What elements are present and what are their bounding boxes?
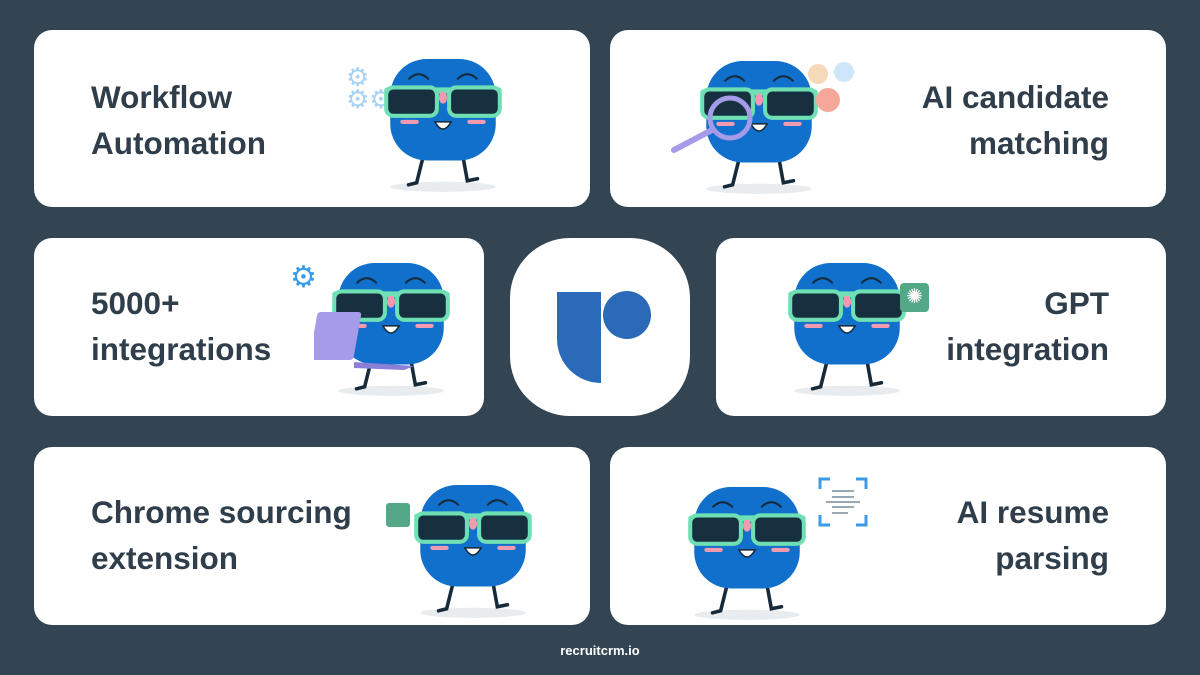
- heading: GPT: [1044, 285, 1109, 321]
- heading: [91, 79, 266, 161]
- icon: scan document: [818, 478, 868, 526]
- card: AI candidate matching: [610, 30, 1166, 207]
- heading: parsing: [995, 540, 1109, 576]
- logo: [510, 238, 690, 416]
- card: 5000+ integrations: [34, 238, 484, 416]
- card: AI resume parsing: [610, 447, 1166, 625]
- mascot: [688, 487, 806, 620]
- heading: [946, 285, 1109, 367]
- heading: Automation: [91, 125, 266, 161]
- heading: AI resume: [957, 494, 1109, 530]
- heading: [91, 494, 352, 576]
- heading: extension: [91, 540, 238, 576]
- heading: matching: [969, 125, 1109, 161]
- icon: gears: [346, 62, 393, 114]
- icon: integrations hub: ⚙: [290, 261, 317, 294]
- mascot: [788, 263, 906, 396]
- card: Workflow Automation: [34, 30, 590, 207]
- heading: AI candidate: [922, 79, 1109, 115]
- heading: [91, 285, 271, 367]
- icon: gears: ⚙: [346, 62, 369, 92]
- icon: chatgpt: [900, 283, 929, 312]
- heading: integration: [946, 331, 1109, 367]
- mascot: [414, 485, 532, 618]
- card: GPT integration: [716, 238, 1166, 416]
- heading: Workflow: [91, 79, 232, 115]
- mascot: [384, 59, 502, 192]
- heading: 5000+: [91, 285, 179, 321]
- icon: chatgpt: ✺: [906, 286, 923, 308]
- heading: [922, 79, 1109, 161]
- icon: puzzle: [386, 503, 410, 527]
- heading: [957, 494, 1109, 576]
- heading: integrations: [91, 331, 271, 367]
- icon: gears: ⚙⚙: [346, 84, 393, 114]
- heading: Chrome sourcing: [91, 494, 352, 530]
- mascot: [332, 263, 450, 396]
- icon: magnifier: [671, 96, 752, 153]
- icon: laptop: [314, 312, 414, 370]
- card: Chrome sourcing extension: [34, 447, 590, 625]
- mascot: [700, 61, 818, 194]
- icon: candidates: [808, 62, 854, 112]
- footer: recruitcrm.io: [560, 643, 640, 658]
